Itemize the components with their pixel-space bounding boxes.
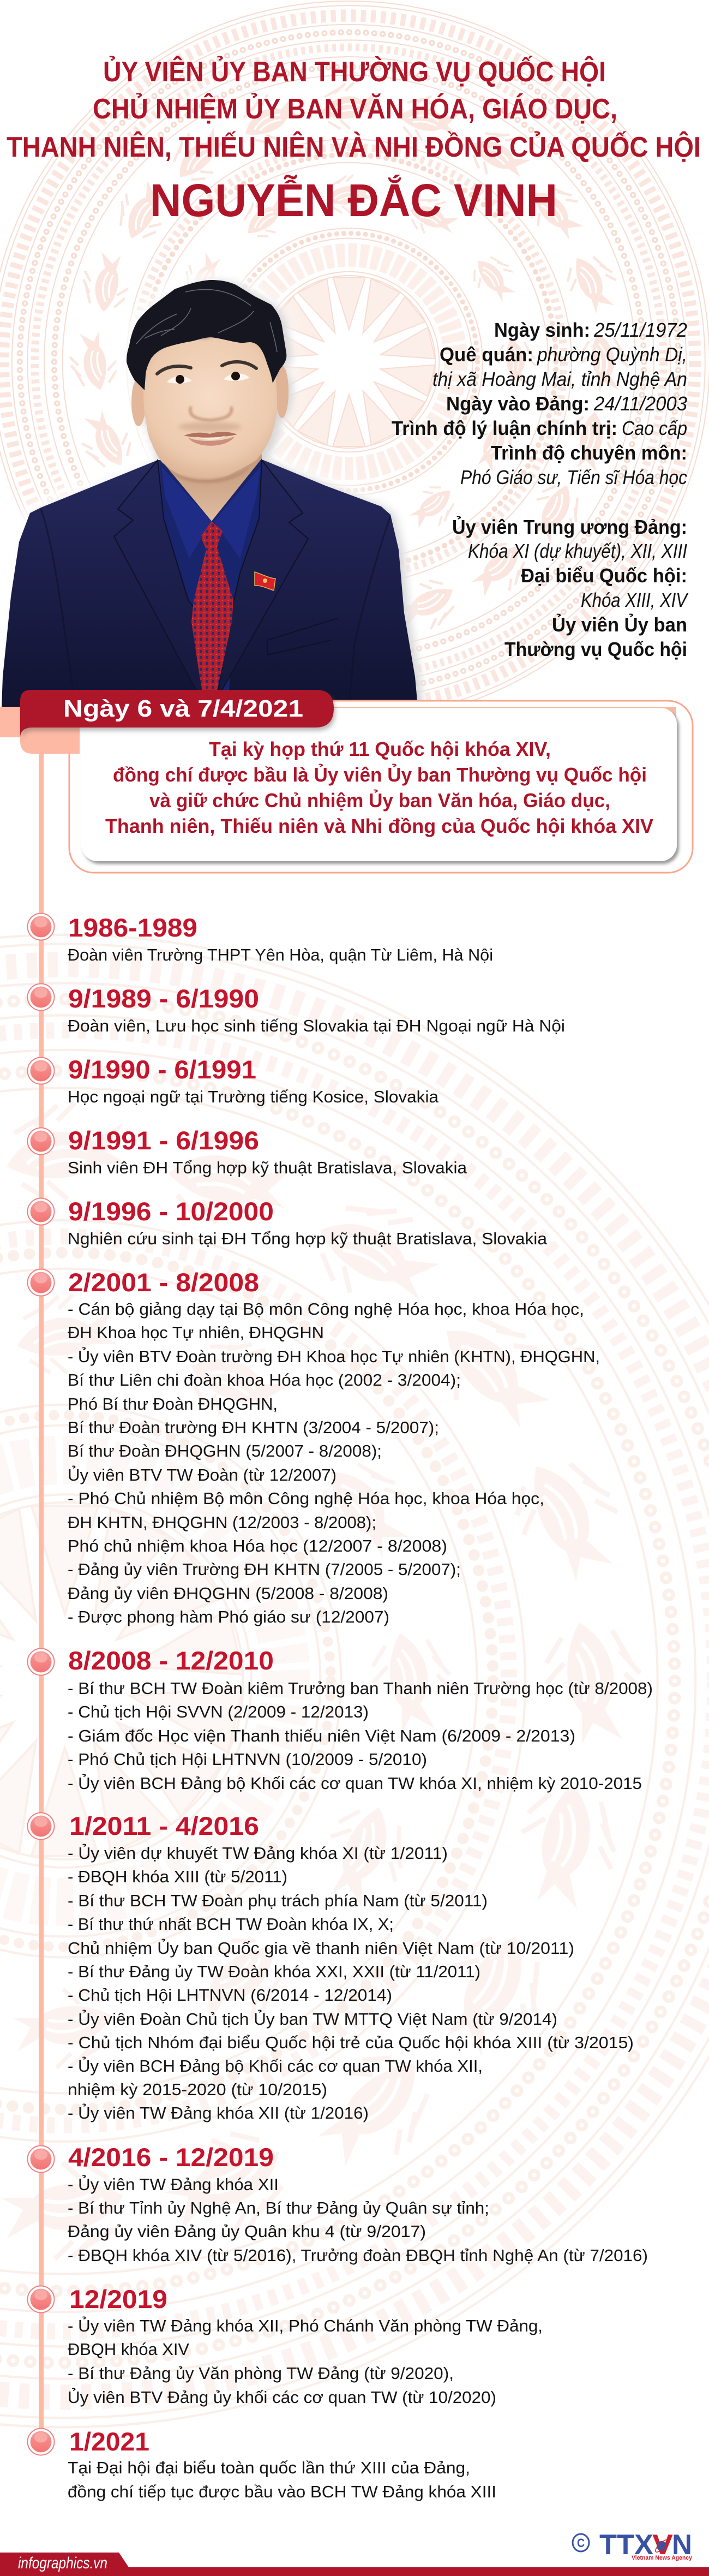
entry: 8/2008 - 12/2010: - Bí thư BCH TW Đoàn kiêm Trưởng ban Thanh niên Trường học (từ 8/2008)	[68, 1679, 653, 1698]
entry: 12/2019: 12/2019	[69, 2285, 167, 2313]
logo: TTXVN: V	[652, 2529, 673, 2561]
biography details	[392, 319, 689, 660]
ears	[131, 378, 146, 426]
callout text: Thanh niên, Thiếu niên và Nhi đồng của Quốc hội khóa XIV	[105, 815, 653, 837]
entry: 9/1989 - 6/1990: Đoàn viên, Lưu học sinh tiếng Slovakia tại ĐH Ngoại ngữ Hà Nội	[68, 1016, 565, 1035]
hair	[127, 280, 286, 390]
entry: 9/1990 - 6/1991	[27, 1055, 439, 1106]
person name: NGUYỄN ĐẮC VINH	[150, 175, 557, 226]
entry: 9/1996 - 10/2000	[27, 1197, 548, 1248]
biography details: Đại biểu Quốc hội:	[521, 564, 687, 587]
entry: 1/2011 - 4/2016: 1/2011 - 4/2016	[69, 1811, 259, 1840]
entry: 12/2019: Ủy viên BTV Đảng ủy khối các cơ quan TW (từ 10/2020)	[68, 2387, 496, 2407]
eyes	[167, 372, 250, 384]
biography details: Ủy viên Trung ương Đảng:	[452, 515, 687, 538]
entry: 1/2011 - 4/2016: - Ủy viên BCH Đảng bộ Khối các cơ quan TW khóa XII,	[68, 2056, 483, 2076]
pink side block	[0, 707, 21, 737]
lapels	[114, 460, 207, 699]
entry: 8/2008 - 12/2010: - Phó Chủ tịch Hội LHTNVN (10/2009 - 5/2010)	[68, 1750, 427, 1769]
footer bar: infographics.vn	[18, 2554, 107, 2572]
portrait photo illustration	[2, 280, 423, 708]
callout text: Tại kỳ họp thứ 11 Quốc hội khóa XIV,	[209, 738, 551, 760]
biography details: Quê quán:	[440, 343, 533, 366]
callout text: đồng chí được bầu là Ủy viên Ủy ban Thường vụ Quốc hội	[113, 763, 647, 786]
title	[7, 56, 701, 163]
entry: 1986-1989: Đoàn viên Trường THPT Yên Hòa, quận Từ Liêm, Hà Nội	[68, 945, 493, 964]
entry: 1/2011 - 4/2016: - Ủy viên Đoàn Chủ tịch Ủy ban TW MTTQ Việt Nam (từ 9/2014)	[68, 2009, 557, 2029]
biography details: phường Quỳnh Dị,	[537, 343, 687, 366]
entry: 1/2011 - 4/2016: - Bí thư thứ nhất BCH TW Đoàn khóa IX, X;	[68, 1915, 394, 1934]
forehead thin hair	[187, 309, 219, 337]
face	[143, 333, 277, 480]
entry: 2/2001 - 8/2008	[27, 1268, 600, 1626]
entry: 12/2019: - Ủy viên TW Đảng khóa XII, Phó Chánh Văn phòng TW Đảng,	[68, 2316, 543, 2335]
entry: 8/2008 - 12/2010	[27, 1646, 653, 1793]
entry: 4/2016 - 12/2019: - Bí thư Tỉnh ủy Nghệ An, Bí thư Đảng ủy Quân sự tỉnh;	[68, 2198, 489, 2217]
suit jacket	[2, 460, 418, 707]
entry: 4/2016 - 12/2019: - ĐBQH khóa XIV (từ 5/2016), Trưởng đoàn ĐBQH tỉnh Nghệ An (từ 7/2016)	[68, 2246, 648, 2265]
entry: 8/2008 - 12/2010: - Giám đốc Học viện Thanh thiếu niên Việt Nam (6/2009 - 2/2013)	[68, 1726, 575, 1745]
entry: 2/2001 - 8/2008: - Ủy viên BTV Đoàn trường ĐH Khoa học Tự nhiên (KHTN), ĐHQGHN,	[68, 1346, 600, 1366]
biography details: Khóa XIII, XIV	[581, 589, 689, 611]
callout text: và giữ chức Chủ nhiệm Ủy ban Văn hóa, Giáo dục,	[149, 789, 610, 812]
date text: Ngày 6 và 7/4/2021	[63, 695, 303, 722]
entry: 9/1991 - 6/1996: 9/1991 - 6/1996	[68, 1126, 259, 1155]
biography details: Cao cấp	[622, 417, 687, 439]
biography details: 24/11/2003	[593, 392, 687, 415]
biography details: Thường vụ Quốc hội	[504, 638, 687, 660]
callout text	[105, 738, 653, 837]
entry: 2/2001 - 8/2008: Bí thư Đoàn ĐHQGHN (5/2007 - 8/2008);	[68, 1441, 382, 1460]
entry: 1986-1989: 1986-1989	[68, 913, 197, 942]
entry: 2/2001 - 8/2008: Bí thư Liên chi đoàn khoa Hóa học (2002 - 3/2004);	[68, 1370, 461, 1390]
entry: 4/2016 - 12/2019: 4/2016 - 12/2019	[68, 2143, 274, 2172]
entry: 4/2016 - 12/2019: - Ủy viên TW Đảng khóa XII	[68, 2174, 279, 2194]
entry: 12/2019: ĐBQH khóa XIV	[68, 2340, 189, 2359]
entry: 1/2011 - 4/2016: - Bí thư Đảng ủy TW Đoàn khóa XXI, XXII (từ 11/2011)	[68, 1962, 480, 1981]
callout pink strip	[327, 707, 676, 723]
timeline	[27, 913, 653, 2501]
logo: TTXVN	[573, 2529, 693, 2561]
entry: 2/2001 - 8/2008: ĐH KHTN, ĐHQGHN (12/2003 - 8/2008);	[68, 1513, 376, 1532]
entry: 1/2021: 1/2021	[69, 2427, 149, 2456]
entry: 8/2008 - 12/2010: - Ủy viên BCH Đảng bộ Khối các cơ quan TW khóa XI, nhiệm kỳ 2010-2015	[68, 1773, 642, 1793]
entry: 9/1989 - 6/1990	[27, 983, 565, 1035]
entry: 9/1996 - 10/2000: 9/1996 - 10/2000	[68, 1197, 274, 1226]
entry: 1/2011 - 4/2016: nhiệm kỳ 2015-2020 (từ 10/2015)	[68, 2080, 327, 2099]
entry: 9/1990 - 6/1991: Học ngoại ngữ tại Trường tiếng Kosice, Slovakia	[68, 1087, 439, 1106]
entry: 12/2019	[27, 2285, 543, 2407]
entry: 2/2001 - 8/2008: - Phó Chủ nhiệm Bộ môn Công nghệ Hóa học, khoa Hóa học,	[68, 1489, 544, 1508]
entry: 9/1996 - 10/2000: Nghiên cứu sinh tại ĐH Tổng hợp kỹ thuật Bratislava, Slovakia	[68, 1229, 548, 1248]
entry: 1986-1989	[27, 913, 493, 964]
logo: TTXVN: C	[577, 2536, 585, 2550]
entry: 2/2001 - 8/2008: Ủy viên BTV TW Đoàn (từ 12/2007)	[68, 1465, 337, 1484]
entry: 1/2011 - 4/2016: - Chủ tịch Hội LHTNVN (6/2014 - 12/2014)	[68, 1985, 392, 2005]
biography details: Ngày sinh:	[494, 319, 590, 341]
collar	[161, 467, 261, 558]
entry: 9/1991 - 6/1996: Sinh viên ĐH Tổng hợp kỹ thuật Bratislava, Slovakia	[68, 1158, 467, 1177]
entry: 2/2001 - 8/2008: Phó Bí thư Đoàn ĐHQGHN,	[68, 1394, 278, 1414]
title: CHỦ NHIỆM ỦY BAN VĂN HÓA, GIÁO DỤC,	[93, 93, 617, 125]
entry: 2/2001 - 8/2008: - Cán bộ giảng dạy tại Bộ môn Công nghệ Hóa học, khoa Hóa học,	[68, 1299, 584, 1319]
entry: 4/2016 - 12/2019	[27, 2143, 648, 2265]
biography details: 25/11/1972	[593, 319, 687, 341]
callout card	[81, 708, 677, 861]
timeline axis	[39, 754, 44, 2443]
entry: 1/2021	[27, 2427, 496, 2501]
entry: 12/2019: - Bí thư Đảng ủy Văn phòng TW Đảng (từ 9/2020),	[68, 2364, 454, 2383]
nose shadow	[190, 407, 232, 420]
entry: 8/2008 - 12/2010: - Chủ tịch Hội SVVN (2/2009 - 12/2013)	[68, 1702, 369, 1721]
entry: 2/2001 - 8/2008: - Được phong hàm Phó giáo sư (12/2007)	[68, 1607, 389, 1626]
entry: 1/2011 - 4/2016: Chủ nhiệm Ủy ban Quốc gia về thanh niên Việt Nam (từ 10/2011)	[68, 1938, 574, 1958]
biography details: thị xã Hoàng Mai, tỉnh Nghệ An	[432, 368, 687, 390]
entry: 1/2011 - 4/2016: - Bí thư BCH TW Đoàn phụ trách phía Nam (từ 5/2011)	[68, 1891, 488, 1910]
background: bronze drum pattern top	[0, 1, 709, 723]
background: bronze drum pattern timeline	[0, 935, 709, 2427]
entry: 2/2001 - 8/2008: - Đảng ủy viên Trường ĐH KHTN (7/2005 - 5/2007);	[68, 1560, 461, 1579]
biography details: Trình độ chuyên môn:	[491, 442, 687, 464]
entry: 2/2001 - 8/2008: Phó chủ nhiệm khoa Hóa học (12/2007 - 8/2008)	[68, 1536, 447, 1555]
biography details: Trình độ lý luận chính trị:	[392, 417, 617, 439]
entry: 2/2001 - 8/2008: ĐH Khoa học Tự nhiên, ĐHQGHN	[68, 1323, 324, 1342]
entry: 2/2001 - 8/2008: Đảng ủy viên ĐHQGHN (5/2008 - 8/2008)	[68, 1584, 388, 1603]
entry: 4/2016 - 12/2019: Đảng ủy viên Đảng ủy Quân khu 4 (từ 9/2017)	[68, 2222, 426, 2241]
entry: 9/1989 - 6/1990: 9/1989 - 6/1990	[68, 984, 259, 1013]
biography details: Ủy viên Ủy ban	[552, 613, 687, 636]
logo: TTXVN: TTX	[599, 2529, 653, 2561]
logo: TTXVN: N	[672, 2529, 692, 2561]
entry: 8/2008 - 12/2010: 8/2008 - 12/2010	[68, 1646, 274, 1675]
logo: TTXVN: Vietnam News Agency	[632, 2555, 693, 2561]
panel: election callout	[20, 690, 693, 873]
entry: 1/2011 - 4/2016	[27, 1811, 634, 2122]
entry: 2/2001 - 8/2008: 2/2001 - 8/2008	[68, 1268, 259, 1297]
entry: 2/2001 - 8/2008: Bí thư Đoàn trường ĐH KHTN (3/2004 - 5/2007);	[68, 1418, 439, 1437]
moustache shade	[178, 422, 242, 432]
biography details: Ngày vào Đảng:	[446, 392, 590, 415]
neck	[160, 437, 262, 521]
entry: 1/2011 - 4/2016: - Ủy viên TW Đảng khóa XII (từ 1/2016)	[68, 2103, 369, 2122]
chin shadow	[169, 465, 251, 484]
breast pocket	[267, 618, 338, 655]
entry: 1/2011 - 4/2016: - ĐBQH khóa XIII (từ 5/2011)	[68, 1867, 287, 1886]
title: ỦY VIÊN ỦY BAN THƯỜNG VỤ QUỐC HỘI	[103, 56, 606, 88]
footer bar	[0, 2553, 709, 2576]
shirt	[160, 460, 267, 690]
entry: 1/2021: Tại Đại hội đại biểu toàn quốc lần thứ XIII của Đảng,	[68, 2458, 470, 2477]
ribbon fold	[20, 728, 80, 754]
party flag pin	[255, 572, 275, 591]
date ribbon	[20, 690, 334, 738]
callout outer frame	[69, 701, 693, 873]
entry: 9/1990 - 6/1991: 9/1990 - 6/1991	[68, 1055, 256, 1084]
tie	[191, 521, 233, 690]
mouth	[184, 432, 237, 446]
entry: 1/2011 - 4/2016: - Ủy viên dự khuyết TW Đảng khóa XI (từ 1/2011)	[68, 1843, 448, 1863]
eyebrows	[157, 362, 256, 374]
entry: 9/1991 - 6/1996	[27, 1126, 467, 1177]
entry: 1/2011 - 4/2016: - Chủ tịch Nhóm đại biểu Quốc hội trẻ của Quốc hội khóa XIII (từ 3/2015)	[68, 2033, 634, 2052]
entry: 1/2021: đồng chí tiếp tục được bầu vào BCH TW Đảng khóa XIII	[68, 2482, 496, 2501]
